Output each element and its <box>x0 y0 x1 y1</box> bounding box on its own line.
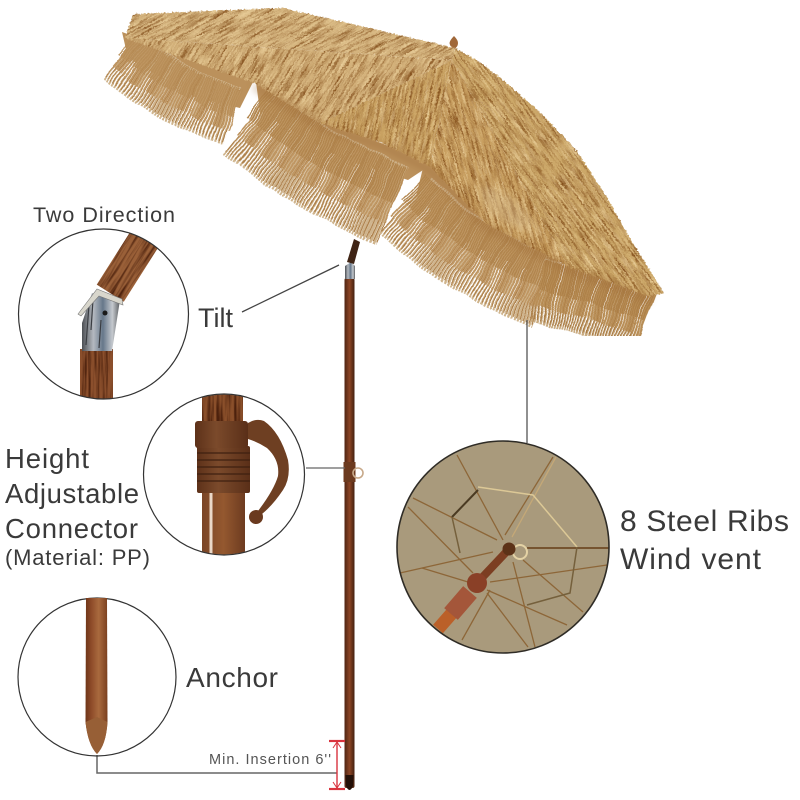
canopy underside <box>397 441 609 653</box>
insertion depth marker <box>329 741 345 789</box>
fringe backing <box>122 32 560 280</box>
top left sector <box>125 7 456 60</box>
hub ring <box>513 545 527 559</box>
umbrella pole <box>344 239 363 790</box>
callout line: tilt <box>242 265 339 312</box>
height adjustment latch <box>344 462 363 482</box>
connector detail contents <box>195 392 289 556</box>
label: steel ribs and wind vent: 8 Steel Ribs <box>620 505 789 538</box>
circle outline <box>18 229 188 399</box>
callout line: anchor <box>97 755 337 773</box>
vent frame lower <box>452 517 577 605</box>
rivet <box>102 310 108 316</box>
joint flange <box>78 289 123 316</box>
label: height adjustable connector: Adjustable <box>5 478 139 509</box>
inner pole <box>438 542 516 629</box>
collar <box>195 421 248 448</box>
detail circle: steel ribs <box>397 441 610 653</box>
label: anchor: Anchor <box>186 662 278 693</box>
ribs and vent <box>400 455 610 647</box>
left sector <box>126 37 452 123</box>
canopy top <box>125 7 664 297</box>
fringe seam shadow <box>254 86 650 300</box>
front sector <box>320 60 453 167</box>
callout line: connector <box>306 467 345 469</box>
arrow heads <box>333 742 341 788</box>
tilt detail contents <box>78 234 158 398</box>
spike tip <box>86 717 108 754</box>
front right sector <box>430 60 569 266</box>
fringe panel right <box>538 275 650 322</box>
label: minimum insertion: Min. Insertion 6'' <box>209 752 331 768</box>
label: steel ribs and wind vent: Wind vent <box>620 543 762 576</box>
upper wood arm <box>96 234 158 302</box>
fringe panel front <box>250 102 400 206</box>
top cap <box>329 740 345 742</box>
upper arm <box>347 239 360 264</box>
vent frame dark <box>452 490 478 517</box>
thatch canopy <box>104 7 664 336</box>
callout line: ribs <box>526 320 528 443</box>
circle outline <box>397 441 609 653</box>
pole tip <box>346 775 354 790</box>
vent frame pale <box>478 487 577 547</box>
detail circle: height adjustable connector <box>144 392 304 556</box>
steel ribs <box>400 455 607 647</box>
bottom cap <box>329 788 345 790</box>
upper tube <box>202 394 243 421</box>
light patch on thatch <box>472 179 538 237</box>
label: height adjustable connector <box>5 443 150 570</box>
label: height adjustable connector: Connector <box>5 513 138 544</box>
label: height adjustable connector: Height <box>5 443 89 474</box>
threaded section <box>197 446 250 493</box>
pole shaft <box>344 278 354 788</box>
metal joint <box>82 293 120 351</box>
tilt joint <box>345 262 355 279</box>
detail circle: two direction tilt <box>18 219 188 401</box>
fringe panel centre right <box>405 187 553 292</box>
vertical measure <box>336 741 338 789</box>
main rib <box>527 547 610 549</box>
label: tilt: Tilt <box>198 303 233 333</box>
label: steel ribs and wind vent <box>620 505 789 576</box>
right sector <box>452 48 664 297</box>
fringe panel left <box>122 43 238 116</box>
circle outline <box>18 598 176 756</box>
label: height adjustable connector: (Material: PP) <box>5 545 150 570</box>
finial <box>450 36 458 49</box>
joint detail marks <box>86 300 101 348</box>
handle knob <box>249 510 263 524</box>
handle <box>248 420 289 514</box>
circle outline <box>144 394 304 555</box>
lower tube <box>202 490 245 556</box>
lower wood tube <box>80 349 113 401</box>
detail circle: anchor <box>18 598 176 756</box>
tube highlight <box>210 492 212 554</box>
label: two direction: Two Direction <box>33 203 175 227</box>
anchor spike <box>86 598 108 754</box>
fringe panels <box>122 43 650 322</box>
